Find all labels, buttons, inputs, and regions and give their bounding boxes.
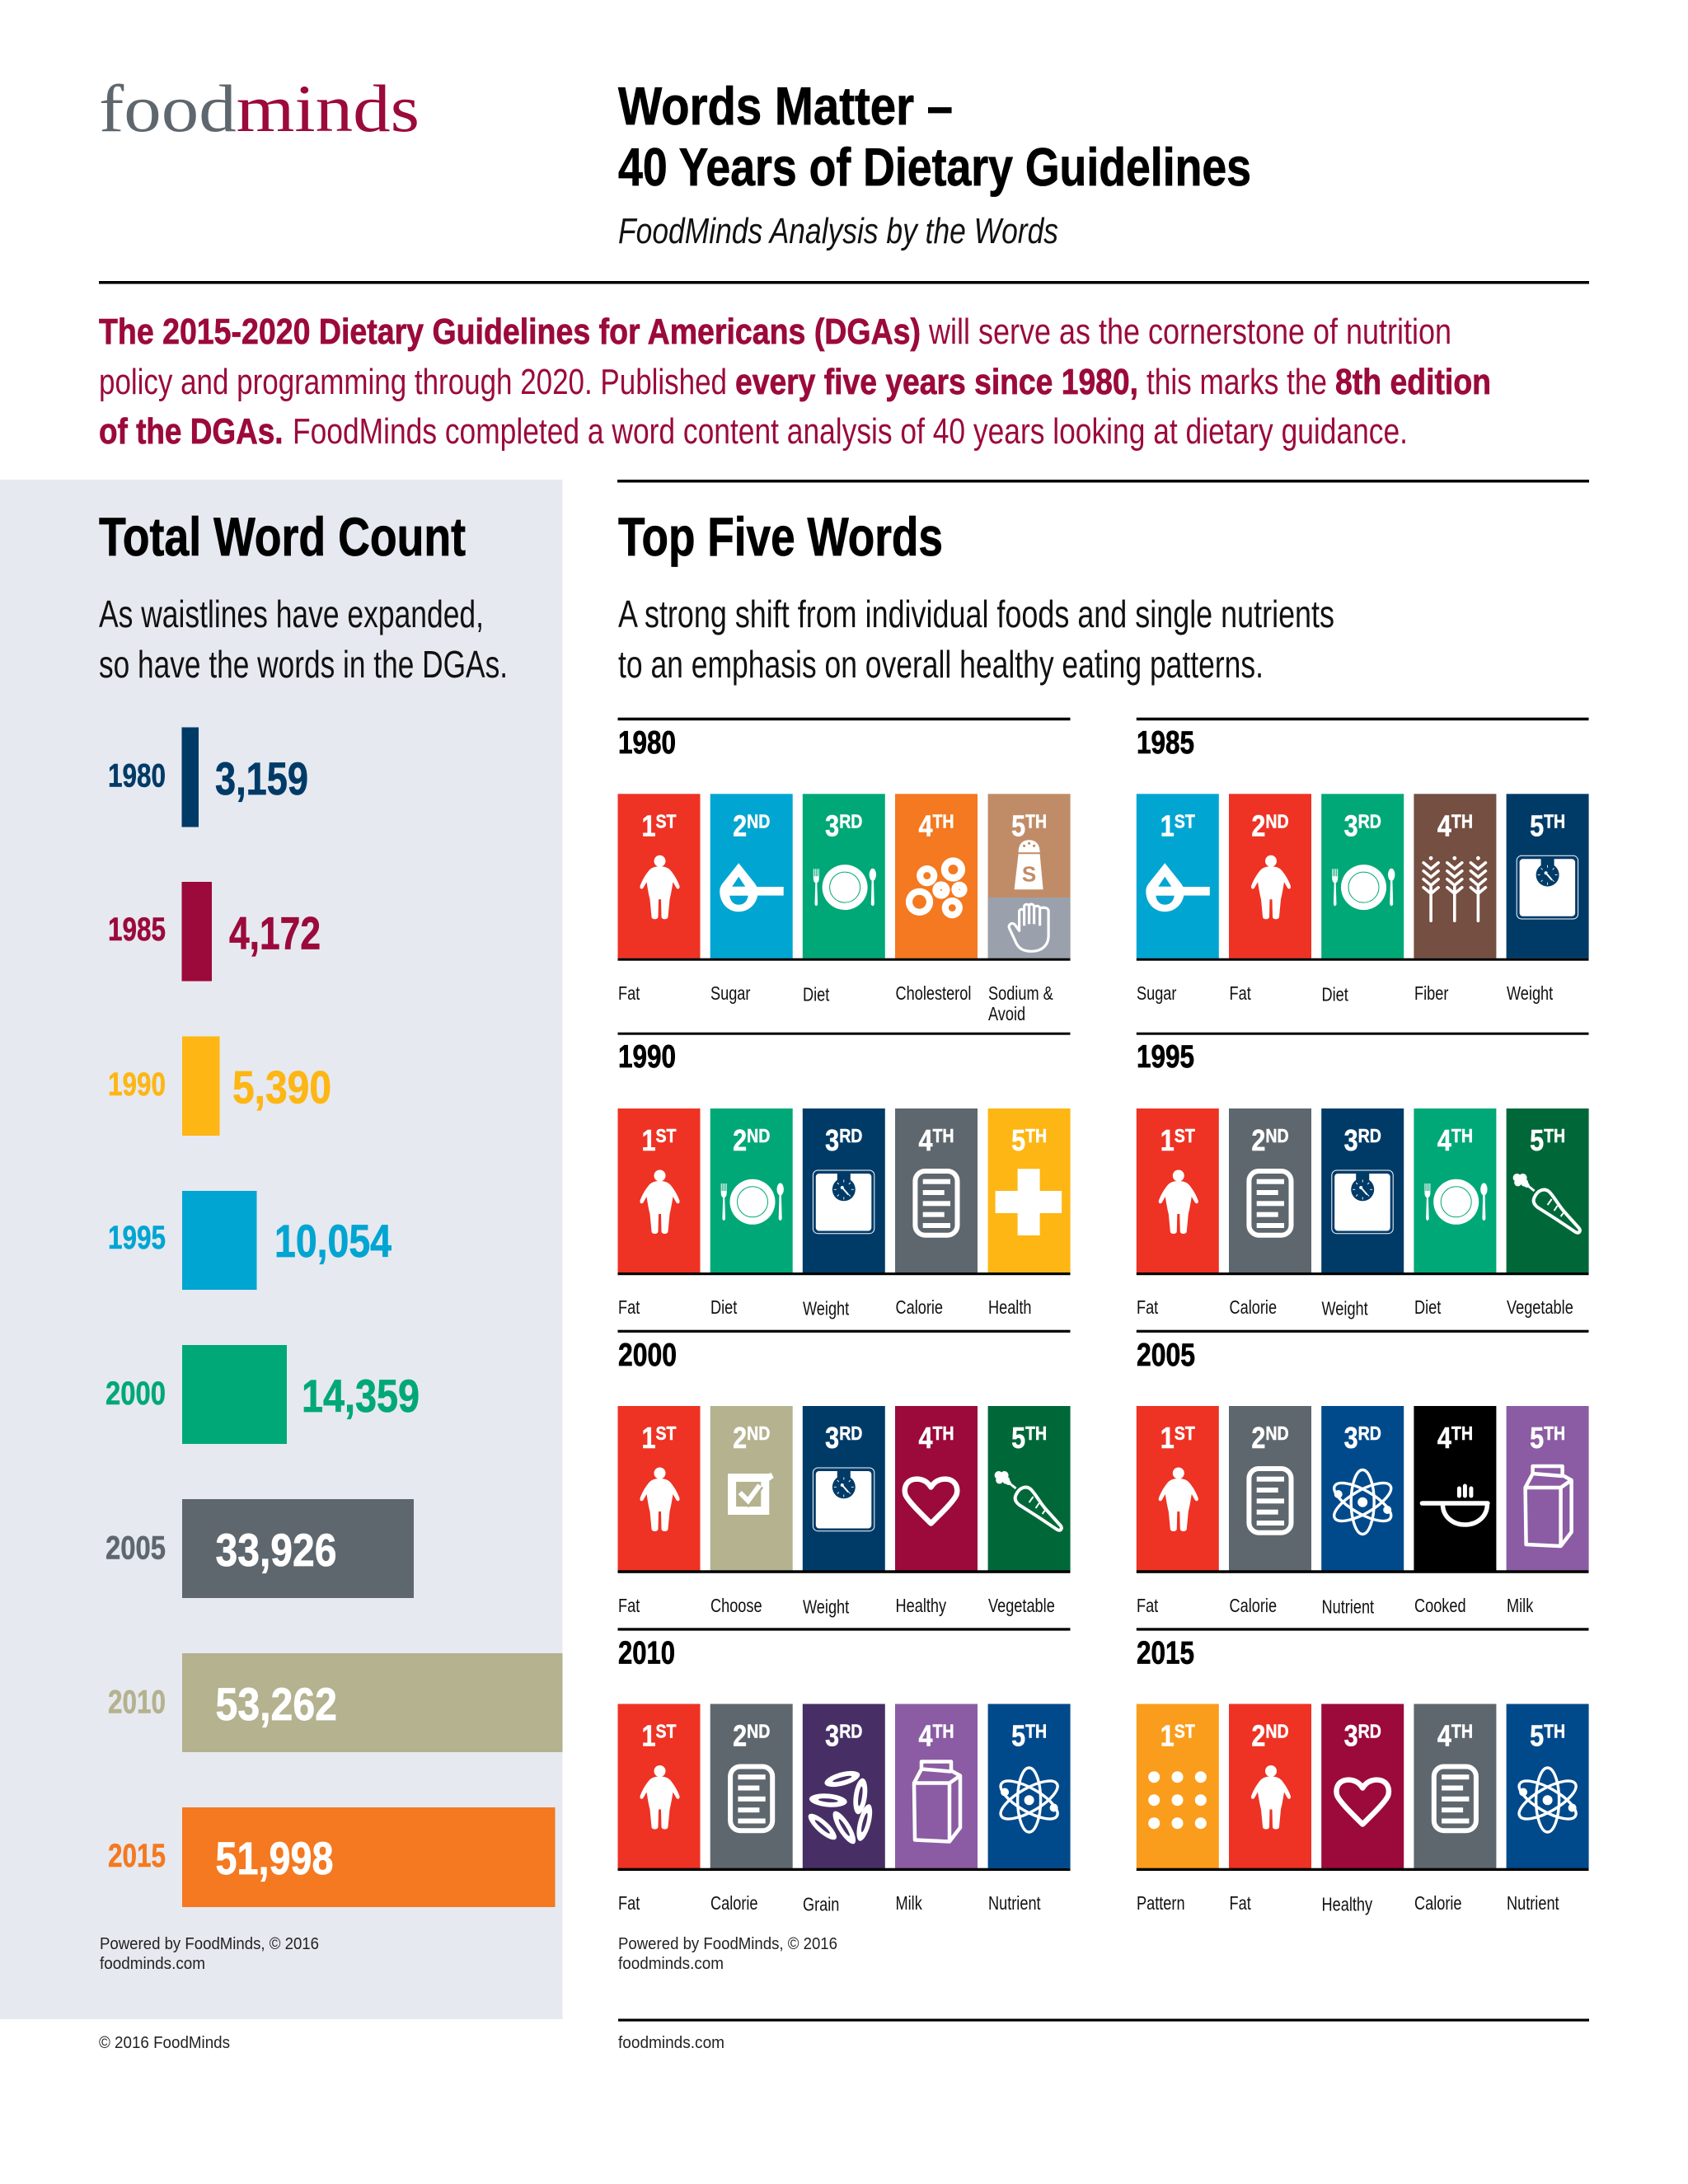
- tile: 4th fiber: [1414, 794, 1496, 958]
- icon: atom: [1514, 1768, 1581, 1832]
- icon: carrot: [995, 1471, 1062, 1530]
- rank: 4: [1437, 1422, 1451, 1455]
- icon: fat person: [1159, 1170, 1198, 1234]
- word labels: Fat: [1229, 983, 1251, 1005]
- rank: ST: [656, 1423, 676, 1444]
- rank: TH: [1451, 1126, 1473, 1146]
- rank: 3: [1344, 1422, 1358, 1455]
- icon: scale: [1517, 855, 1578, 919]
- icon: grains: [804, 1768, 875, 1847]
- icon: fat person: [1251, 855, 1291, 919]
- rank: 2: [733, 1720, 747, 1753]
- word labels: Nutrient: [1507, 1893, 1559, 1915]
- tile: 2nd fat: [1229, 1704, 1311, 1868]
- intro paragraph: of the DGAs.: [99, 411, 284, 452]
- year heading: 2005: [1137, 1338, 1195, 1373]
- word labels: Fat: [618, 983, 640, 1005]
- tile: 3rd diet: [803, 794, 885, 958]
- tile: 5th sodium and avoid: [988, 794, 1071, 958]
- rank: 4: [918, 810, 933, 843]
- tile: 1st fat: [1137, 1406, 1219, 1571]
- rank: TH: [1544, 1423, 1565, 1444]
- word labels: Nutrient: [1322, 1597, 1374, 1618]
- text: waistlines: so have the words in the DGAs.: [99, 643, 508, 686]
- word labels: [618, 1297, 1032, 1319]
- rank: TH: [1025, 1126, 1047, 1146]
- icon: calorie list: [1249, 1469, 1291, 1533]
- icon: fat person: [1159, 1467, 1198, 1531]
- rank: ST: [1175, 1126, 1195, 1146]
- word labels: Nutrient: [988, 1893, 1041, 1915]
- rank: 4: [918, 1422, 933, 1455]
- tile: 4th milk: [895, 1704, 978, 1868]
- year heading: 2010: [618, 1635, 675, 1671]
- text: strong shift: [618, 593, 1334, 686]
- rank: ND: [747, 811, 770, 832]
- tile: 1st fat: [618, 1704, 701, 1868]
- text: strong shift: A strong shift from individual foods and single nutrients: [618, 593, 1334, 635]
- tile: 3rd grain: [803, 1704, 885, 1868]
- icon: milk carton: [914, 1762, 960, 1841]
- tile: 2nd sugar: [710, 794, 793, 958]
- bar: 1990: 1990: [108, 1066, 166, 1103]
- icon: sugar: [720, 863, 784, 912]
- rank: 2: [1251, 1422, 1265, 1455]
- rank: 3: [1344, 810, 1358, 843]
- year heading: 1990: [618, 1039, 676, 1075]
- credit: right: [618, 1935, 837, 1973]
- tile: 1st sugar: [1137, 794, 1219, 958]
- tile: 1st fat: [618, 1108, 701, 1272]
- icon: fat person: [1251, 1765, 1291, 1830]
- heading: top five words: Top Five Words: [618, 506, 943, 567]
- bar: 1985: 1985: [108, 912, 166, 948]
- bar: 1980: 1980: [108, 758, 166, 794]
- word labels: [1137, 1596, 1534, 1618]
- tile: 5th health: [988, 1108, 1071, 1272]
- tile: 4th cholesterol: [895, 794, 978, 958]
- icon: pan: [1422, 1486, 1488, 1525]
- intro paragraph: this marks the: [1146, 362, 1327, 402]
- rank: 1: [642, 810, 656, 843]
- bar: 1980: 3,159: [215, 752, 308, 804]
- rank: TH: [932, 1423, 954, 1444]
- word labels: [618, 1893, 1041, 1915]
- icon: calorie list: [1249, 1171, 1291, 1235]
- rank: 3: [1344, 1720, 1358, 1753]
- rank: 1: [642, 1125, 656, 1158]
- rank: 3: [825, 1720, 839, 1753]
- bar: 2015: 2015: [108, 1838, 166, 1874]
- bar: 1995: 1995: [108, 1220, 166, 1256]
- word labels: Sodium &: [988, 983, 1053, 1005]
- icon: fat person: [640, 1765, 680, 1830]
- word labels: Fat: [618, 1596, 640, 1617]
- rank: ND: [747, 1721, 770, 1742]
- bar: 2010: [108, 1653, 562, 1752]
- tile: 1st fat: [618, 794, 701, 958]
- word labels: Fat: [1229, 1893, 1251, 1915]
- rank: 2: [1251, 810, 1265, 843]
- word labels: Milk: [1507, 1596, 1534, 1617]
- tile: 3rd nutrient: [1321, 1406, 1404, 1571]
- icon: dots: [1148, 1771, 1207, 1829]
- logo: foodminds: foodminds: [99, 71, 420, 146]
- bar: 1995: 10,054: [274, 1215, 392, 1267]
- rank: TH: [1025, 811, 1047, 832]
- tile: 4th cooked: [1414, 1406, 1496, 1571]
- tile: 2nd calorie: [710, 1704, 793, 1868]
- icon: rings: [906, 857, 968, 919]
- tile: 5th nutrient: [1507, 1704, 1589, 1868]
- title: [618, 76, 1251, 197]
- word labels: Grain: [803, 1895, 839, 1915]
- word labels: Fat: [618, 1297, 640, 1319]
- icon: fat person: [640, 855, 680, 919]
- rank: 3: [1344, 1125, 1358, 1158]
- bar: 2010: 2010: [108, 1685, 166, 1721]
- intro paragraph: 8th edition: [1335, 362, 1491, 402]
- bar: 2000: 2000: [106, 1376, 166, 1412]
- rank: ND: [1265, 811, 1289, 832]
- tile: 5th vegetable: [988, 1406, 1071, 1571]
- rank: TH: [1025, 1423, 1047, 1444]
- rank: TH: [1451, 1423, 1473, 1444]
- bar: 1980: [108, 727, 308, 827]
- rank: 1: [1160, 810, 1175, 843]
- word labels: [1137, 1893, 1559, 1915]
- intro paragraph: The 2015-2020 Dietary Guidelines for Americans (DGAs): [99, 312, 921, 352]
- rank: TH: [1544, 1721, 1565, 1742]
- rank: ST: [656, 1721, 676, 1742]
- panel: 2015: [1137, 1628, 1589, 1915]
- bar: 2005: [106, 1499, 414, 1598]
- word labels: Sugar: [1137, 983, 1177, 1005]
- year heading: 2000: [618, 1338, 677, 1373]
- word labels: Healthy: [896, 1596, 947, 1617]
- rank: ND: [1265, 1423, 1289, 1444]
- rank: TH: [1451, 811, 1473, 832]
- rank: ND: [1265, 1721, 1289, 1742]
- tile: 2nd diet: [710, 1108, 793, 1272]
- icon: checkbox: [732, 1473, 774, 1511]
- rank: TH: [932, 1126, 954, 1146]
- rank: RD: [1358, 811, 1381, 832]
- tile: 2nd fat: [1229, 794, 1311, 958]
- tile: 5th milk: [1507, 1406, 1589, 1571]
- bar: 1995: [108, 1191, 392, 1290]
- word labels: Weight: [1322, 1299, 1368, 1319]
- word labels: Diet: [803, 985, 830, 1005]
- text: waistlines: As waistlines have expanded,: [99, 593, 484, 635]
- rank: TH: [1025, 1721, 1047, 1742]
- panel: 1980: [618, 718, 1071, 1025]
- rank: TH: [1544, 1126, 1565, 1146]
- rank: TH: [1544, 811, 1565, 832]
- rank: 2: [733, 810, 747, 843]
- panel: 1990: [618, 1033, 1071, 1319]
- rank: ND: [747, 1126, 770, 1146]
- rank: ST: [1175, 1721, 1195, 1742]
- icon: plate: [721, 1179, 784, 1225]
- intro paragraph: FoodMinds completed a word content analysis of 40 years looking at dietary guidance.: [293, 411, 1408, 452]
- rank: 2: [733, 1125, 747, 1158]
- icon: scale: [813, 1170, 874, 1234]
- icon: calorie list: [730, 1767, 772, 1830]
- rank: 1: [642, 1720, 656, 1753]
- rank: 5: [1011, 1125, 1025, 1158]
- tile: 2nd choose: [710, 1406, 793, 1571]
- icon: hand: [1009, 904, 1048, 951]
- rank: 1: [1160, 1720, 1175, 1753]
- panel: total word count: [0, 480, 562, 2019]
- word labels: Diet: [710, 1297, 738, 1319]
- word labels: Vegetable: [988, 1596, 1055, 1617]
- rank: ND: [1265, 1126, 1289, 1146]
- word labels: Sugar: [710, 983, 751, 1005]
- rank: 5: [1530, 810, 1544, 843]
- intro paragraph: will serve as the cornerstone of nutrition: [928, 312, 1451, 352]
- rank: 5: [1011, 1720, 1025, 1753]
- tile: 2nd calorie: [1229, 1406, 1311, 1571]
- word labels: Fat: [1137, 1297, 1158, 1319]
- text: waistlines: [99, 593, 508, 686]
- rank: 1: [642, 1422, 656, 1455]
- icon: plate: [814, 865, 876, 910]
- rank: ST: [656, 811, 676, 832]
- bar: 1990: 5,390: [232, 1062, 331, 1113]
- word labels: Milk: [896, 1893, 922, 1915]
- rank: 4: [1437, 1720, 1451, 1753]
- icon: scale: [813, 1468, 874, 1531]
- rank: 4: [918, 1125, 933, 1158]
- icon: wheat: [1423, 856, 1485, 921]
- word labels: Weight: [1507, 983, 1553, 1005]
- rank: TH: [932, 1721, 954, 1742]
- footer: copyright: © 2016 FoodMinds: [99, 2034, 230, 2052]
- tile: 3rd healthy: [1321, 1704, 1404, 1868]
- word labels: Cooked: [1414, 1596, 1466, 1617]
- word labels: Weight: [803, 1597, 849, 1618]
- icon: heart: [1336, 1780, 1389, 1825]
- bar: 2010: 53,262: [216, 1678, 337, 1730]
- credit: right: foodminds.com: [618, 1955, 724, 1973]
- icon: plate: [1424, 1179, 1488, 1225]
- rank: RD: [1358, 1423, 1381, 1444]
- rank: 5: [1011, 810, 1025, 843]
- tile: 5th vegetable: [1507, 1108, 1589, 1272]
- word labels: Fat: [618, 1893, 640, 1915]
- credit: left: Powered by FoodMinds, © 2016: [100, 1935, 319, 1953]
- word labels: Calorie: [896, 1297, 943, 1319]
- credit: right: Powered by FoodMinds, © 2016: [618, 1935, 837, 1953]
- rank: TH: [1451, 1721, 1473, 1742]
- rank: 4: [1437, 810, 1451, 843]
- rank: 3: [825, 810, 839, 843]
- icon: plus: [996, 1169, 1062, 1235]
- tile: 4th healthy: [895, 1406, 978, 1571]
- title: 40 Years of Dietary Guidelines: [618, 137, 1251, 197]
- tile: 1st fat: [618, 1406, 701, 1571]
- word labels: Calorie: [1229, 1596, 1277, 1617]
- text: strong shift: to an emphasis on overall healthy eating patterns.: [618, 643, 1264, 686]
- word labels: Pattern: [1137, 1893, 1185, 1915]
- rank: 1: [1160, 1125, 1175, 1158]
- icon: salt shaker: [1015, 840, 1043, 889]
- rank: ND: [747, 1423, 770, 1444]
- icon: calorie list: [1434, 1767, 1476, 1830]
- rank: 3: [825, 1125, 839, 1158]
- word labels: Avoid: [988, 1004, 1025, 1025]
- rank: 4: [918, 1720, 933, 1753]
- word labels: Diet: [1414, 1297, 1442, 1319]
- credit: left: foodminds.com: [100, 1955, 205, 1973]
- rank: RD: [839, 1423, 862, 1444]
- rank: RD: [839, 1126, 862, 1146]
- icon: fat person: [640, 1170, 680, 1234]
- bar: 2015: [108, 1807, 556, 1907]
- rank: 5: [1530, 1125, 1544, 1158]
- icon: milk carton: [1526, 1466, 1572, 1546]
- rank: RD: [1358, 1126, 1381, 1146]
- rank: RD: [839, 811, 862, 832]
- word labels: Diet: [1322, 985, 1348, 1005]
- icon: salt shaker: S: [1022, 861, 1036, 886]
- word labels: Cholesterol: [896, 983, 971, 1005]
- rank: 1: [1160, 1422, 1175, 1455]
- icon: calorie list: [915, 1171, 958, 1235]
- rank: 5: [1011, 1422, 1025, 1455]
- bar: 1990: [108, 1037, 331, 1136]
- rank: ST: [1175, 1423, 1195, 1444]
- heading: total word count: Total Word Count: [99, 506, 466, 567]
- word labels: Weight: [803, 1299, 849, 1319]
- footer: url: foodminds.com: [618, 2034, 724, 2052]
- panel: 2010: [618, 1628, 1071, 1915]
- tile: 5th nutrient: [988, 1704, 1071, 1868]
- rank: 2: [733, 1422, 747, 1455]
- subtitle: FoodMinds Analysis by the Words: [618, 211, 1058, 251]
- rank: 5: [1530, 1720, 1544, 1753]
- icon: plate: [1332, 865, 1395, 910]
- tile: 3rd weight: [803, 1108, 885, 1272]
- tile: 1st fat: [1137, 1108, 1219, 1272]
- panel: 2000: [618, 1330, 1071, 1618]
- rank: TH: [932, 811, 954, 832]
- year heading: 1980: [618, 725, 676, 761]
- panel: 1995: [1137, 1033, 1589, 1319]
- rank: 5: [1530, 1422, 1544, 1455]
- icon: carrot: [1513, 1174, 1580, 1233]
- icon: heart: [905, 1479, 957, 1523]
- word labels: Health: [988, 1297, 1032, 1319]
- icon: sugar: [1146, 863, 1210, 912]
- tile: 5th weight: [1507, 794, 1589, 958]
- word labels: [1137, 983, 1553, 1005]
- word labels: Fat: [1137, 1596, 1158, 1617]
- rank: 4: [1437, 1125, 1451, 1158]
- rank: 2: [1251, 1720, 1265, 1753]
- panel: 1985: [1137, 718, 1589, 1005]
- word labels: Calorie: [1229, 1297, 1277, 1319]
- word labels: Healthy: [1322, 1895, 1373, 1915]
- tile: 3rd weight: [803, 1406, 885, 1571]
- icon: scale: [1332, 1170, 1393, 1234]
- tile: 3rd weight: [1321, 1108, 1404, 1272]
- bar: 2005: 33,926: [216, 1524, 336, 1576]
- year heading: 1995: [1137, 1039, 1194, 1075]
- rank: 3: [825, 1422, 839, 1455]
- intro paragraph: policy and programming through 2020. Published: [99, 362, 727, 402]
- tile: 3rd diet: [1321, 794, 1404, 958]
- word labels: Vegetable: [1507, 1297, 1573, 1319]
- tile: 4th diet: [1414, 1108, 1496, 1272]
- credit: left: [100, 1935, 319, 1973]
- word labels: [618, 983, 1053, 1025]
- bar: 2000: 14,359: [302, 1370, 420, 1422]
- rank: 2: [1251, 1125, 1265, 1158]
- tile: 2nd calorie: [1229, 1108, 1311, 1272]
- icon: atom: [996, 1768, 1062, 1832]
- year heading: 2015: [1137, 1635, 1194, 1671]
- intro paragraph: [99, 312, 1491, 452]
- rank: RD: [1358, 1721, 1381, 1742]
- icon: fat person: [640, 1467, 680, 1531]
- bar: 2005: 2005: [106, 1530, 166, 1566]
- word labels: Calorie: [710, 1893, 758, 1915]
- word labels: [1137, 1297, 1573, 1319]
- tile: 4th calorie: [1414, 1704, 1496, 1868]
- intro paragraph: every five years since 1980,: [735, 362, 1138, 402]
- rank: ST: [656, 1126, 676, 1146]
- word labels: [618, 1596, 1055, 1618]
- title: Words Matter –: [618, 76, 953, 136]
- year heading: 1985: [1137, 725, 1194, 761]
- tile: 4th calorie: [895, 1108, 978, 1272]
- word labels: Calorie: [1414, 1893, 1462, 1915]
- tile: 1st pattern: [1137, 1704, 1219, 1868]
- word labels: Choose: [710, 1596, 762, 1617]
- bar: 1985: [108, 882, 321, 981]
- bar: 1985: 4,172: [229, 907, 321, 959]
- bar: 2015: 51,998: [216, 1832, 333, 1884]
- panel: 2005: [1137, 1330, 1589, 1618]
- icon: atom: [1329, 1470, 1396, 1535]
- rank: ST: [1175, 811, 1195, 832]
- bar: 2000: [106, 1345, 420, 1444]
- rank: RD: [839, 1721, 862, 1742]
- word labels: Fiber: [1414, 983, 1448, 1005]
